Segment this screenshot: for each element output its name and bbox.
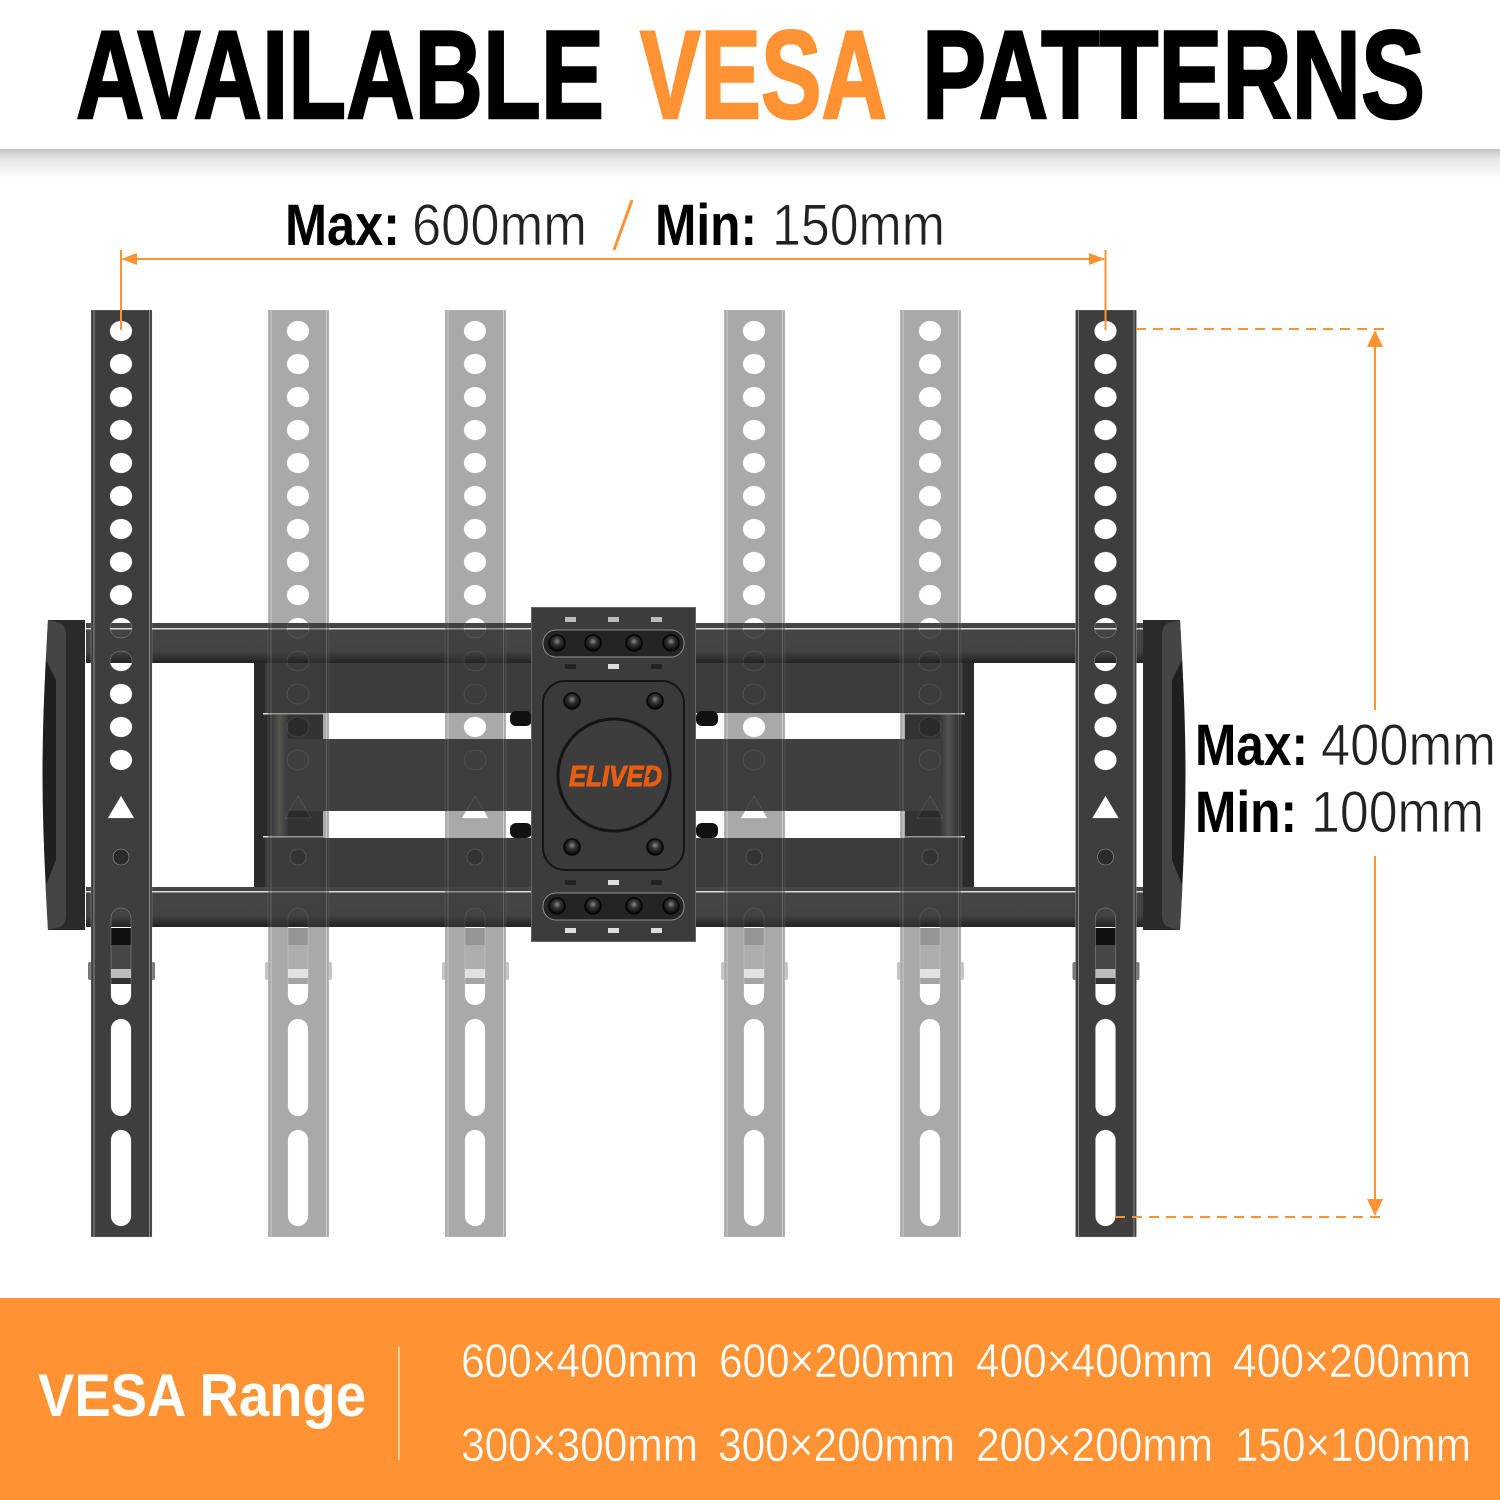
width label: 150mm — [772, 193, 945, 258]
mount arm assembly — [42, 620, 1186, 930]
VESA size list: 600×200mm — [719, 1334, 955, 1387]
VESA size list: 150×100mm — [1235, 1418, 1471, 1471]
footer band — [0, 1298, 1500, 1500]
VESA range heading: VESA Range — [38, 1362, 366, 1429]
right solid bracket — [1072, 310, 1140, 1237]
VESA size list: 300×300mm — [461, 1418, 698, 1471]
VESA size list: 300×200mm — [718, 1418, 955, 1471]
width label: Max: — [285, 193, 400, 258]
title: VESA — [640, 6, 887, 145]
width label — [285, 193, 945, 258]
nuts beside center plate — [510, 711, 718, 838]
width label: 600mm — [412, 193, 587, 258]
rear plate — [254, 663, 974, 888]
panel screws — [564, 693, 663, 855]
ghost bracket 300mm left — [265, 310, 332, 1237]
bottom screw slot — [543, 893, 684, 920]
height label: Min: — [1195, 780, 1297, 845]
VESA size list: 400×400mm — [976, 1334, 1213, 1387]
width dimension line — [121, 250, 1106, 330]
right handle — [1143, 620, 1186, 930]
height label: 100mm — [1311, 780, 1484, 845]
ghost bracket 200mm right — [721, 310, 788, 1237]
top bar — [86, 623, 1143, 663]
title: AVAILABLE — [76, 6, 604, 145]
VESA size list — [461, 1334, 1471, 1471]
ghost bracket 200mm left — [442, 310, 509, 1237]
left handle — [42, 620, 85, 930]
width label: Min: — [655, 193, 757, 258]
footer divider — [398, 1347, 400, 1460]
ghost bracket 300mm right — [897, 310, 964, 1237]
VESA size list: 400×200mm — [1233, 1334, 1471, 1387]
top screw slot — [543, 630, 684, 657]
header band — [0, 0, 1500, 179]
pivot right — [905, 713, 965, 838]
VESA size list: 200×200mm — [976, 1418, 1213, 1471]
pivot left — [263, 713, 323, 838]
height label: Max: — [1195, 713, 1308, 778]
center plate — [532, 608, 696, 942]
logo disc — [558, 719, 670, 831]
bottom bar — [86, 887, 1143, 927]
height dimension lines — [1115, 329, 1385, 1217]
VESA size list: 600×400mm — [461, 1334, 698, 1387]
left solid bracket — [88, 310, 155, 1237]
height label — [1195, 713, 1496, 845]
recessed panel — [543, 681, 684, 870]
logo: ELIVED — [569, 761, 662, 793]
title — [76, 6, 1425, 145]
tabs — [565, 617, 662, 933]
middle arm — [287, 739, 941, 811]
